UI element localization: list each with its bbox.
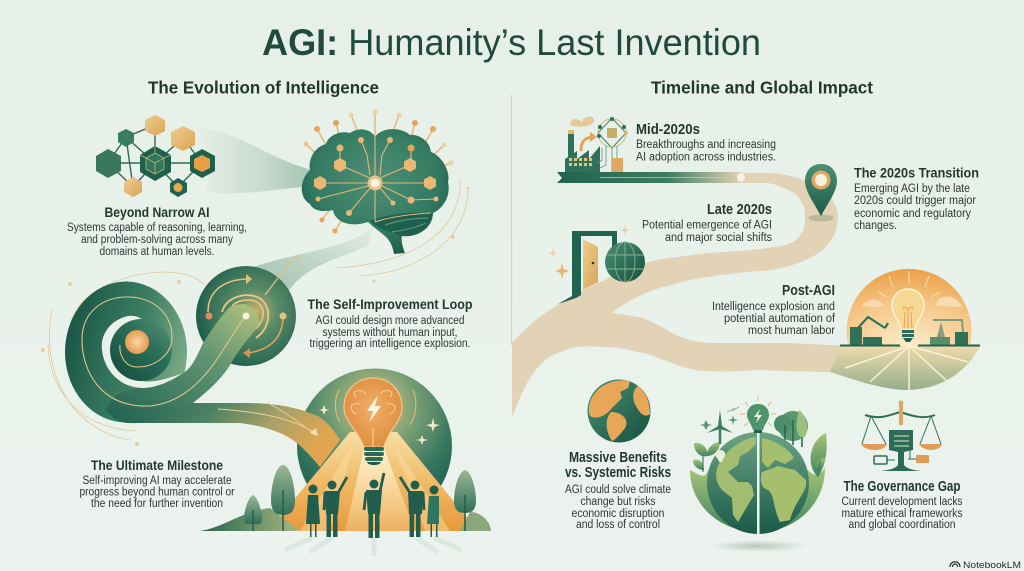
title: AGI: Humanity’s Last Invention <box>262 22 761 63</box>
text: mid-2020s <box>636 122 776 164</box>
icon: circuit brain <box>302 110 454 254</box>
text: the self-improvement loop: AGI could design more advanced <box>316 315 464 327</box>
text: mid-2020s: AI adoption across industries. <box>636 152 776 164</box>
arrow: swoosh from brain to loop <box>250 226 374 304</box>
illustration: five people looking up <box>306 473 439 538</box>
text: mid-2020s: Breakthroughs and increasing <box>636 139 776 151</box>
icon: location pin <box>805 164 837 222</box>
text: the self-improvement loop <box>308 296 472 350</box>
icon: neural network of cubes <box>96 115 215 197</box>
text: late 2020s: Late 2020s <box>707 202 772 218</box>
text: the self-improvement loop: triggering an intelligence explosion. <box>310 338 470 350</box>
text: late 2020s: and major social shifts <box>665 232 772 244</box>
text: the 2020s transition: changes. <box>854 220 897 232</box>
text: beyond narrow AI: Beyond Narrow AI <box>104 204 210 220</box>
text: mid-2020s: Mid-2020s <box>636 122 700 138</box>
text: massive benefits vs. systemic risks: Massive Benefits <box>569 449 667 466</box>
illustration: light pyramid <box>268 432 478 531</box>
text: the governance gap: mature ethical frameworks <box>842 508 963 520</box>
icon: earth with leaves, bulb and turbine <box>690 397 827 552</box>
arrow: swoosh from network to brain <box>192 127 312 193</box>
icon: scales of governance <box>861 400 942 471</box>
text: the governance gap: and global coordination <box>848 519 956 531</box>
text: massive benefits vs. systemic risks <box>565 449 671 531</box>
text: the ultimate milestone: the need for further invention <box>91 498 223 510</box>
text: the governance gap <box>842 479 963 531</box>
text: post-AGI <box>712 283 836 337</box>
text: massive benefits vs. systemic risks: AGI could solve climate <box>565 484 671 496</box>
text: the ultimate milestone: Self-improving AI may accelerate <box>82 475 232 487</box>
heading: the evolution of intelligence: The Evolution of Intelligence <box>148 78 379 98</box>
text: the self-improvement loop: systems without human input, <box>322 327 458 339</box>
icon: door and globe <box>548 225 645 304</box>
text: the 2020s transition: Emerging AGI by the late <box>854 183 970 195</box>
NotebookLM logo: NotebookLM <box>963 560 1021 571</box>
text: the 2020s transition: economic and regulatory <box>854 208 971 220</box>
text: the 2020s transition <box>854 164 979 232</box>
text: the 2020s transition: 2020s could trigger major <box>854 195 976 207</box>
text: the self-improvement loop: The Self-Improvement Loop <box>308 296 472 312</box>
icon: post-AGI sunrise <box>830 269 980 390</box>
text: beyond narrow AI <box>67 204 247 258</box>
timeline road <box>512 173 860 417</box>
ribbon: start of timeline <box>557 172 741 183</box>
text: the 2020s transition: The 2020s Transition <box>854 164 979 180</box>
text: late 2020s: Potential emergence of AGI <box>642 220 772 232</box>
icon: factory and network <box>565 116 628 172</box>
text: the ultimate milestone: The Ultimate Milestone <box>91 457 223 473</box>
icon: spiral <box>65 282 260 423</box>
icon: loop circle <box>196 255 300 366</box>
arrow: band from spiral to loop <box>106 304 260 423</box>
text: post-AGI: Post-AGI <box>782 283 835 299</box>
text: massive benefits vs. systemic risks: vs. Systemic Risks <box>565 464 671 481</box>
illustration: hills and trees <box>200 465 491 531</box>
text: post-AGI: most human labor <box>748 325 835 337</box>
text: late 2020s <box>642 202 772 244</box>
text: beyond narrow AI: and problem-solving across many <box>81 234 233 246</box>
heading: timeline and global impact: Timeline and Global Impact <box>651 78 873 98</box>
text: beyond narrow AI: domains at human levels. <box>100 246 214 258</box>
icon: small earth <box>588 380 650 442</box>
text: post-AGI: potential automation of <box>724 313 836 325</box>
panel: timeline and global impact <box>512 116 980 552</box>
text: the ultimate milestone: progress beyond human control or <box>80 486 235 498</box>
text: the governance gap: Current development lacks <box>842 496 963 508</box>
arrow: band from spiral to bulb <box>130 403 340 467</box>
text: massive benefits vs. systemic risks: change but risks <box>580 496 656 508</box>
text: the ultimate milestone <box>80 457 235 510</box>
text: beyond narrow AI: Systems capable of reasoning, learning, <box>67 222 247 234</box>
icon: light bulb <box>344 378 402 465</box>
icon: light bulb with circle <box>297 368 452 524</box>
illustration: light shadows <box>285 538 462 556</box>
text: post-AGI: Intelligence explosion and <box>712 301 835 313</box>
text: the governance gap: The Governance Gap <box>844 479 961 495</box>
text: massive benefits vs. systemic risks: and loss of control <box>576 519 660 531</box>
panel: the evolution of intelligence <box>41 110 491 556</box>
text: massive benefits vs. systemic risks: economic disruption <box>572 508 664 520</box>
